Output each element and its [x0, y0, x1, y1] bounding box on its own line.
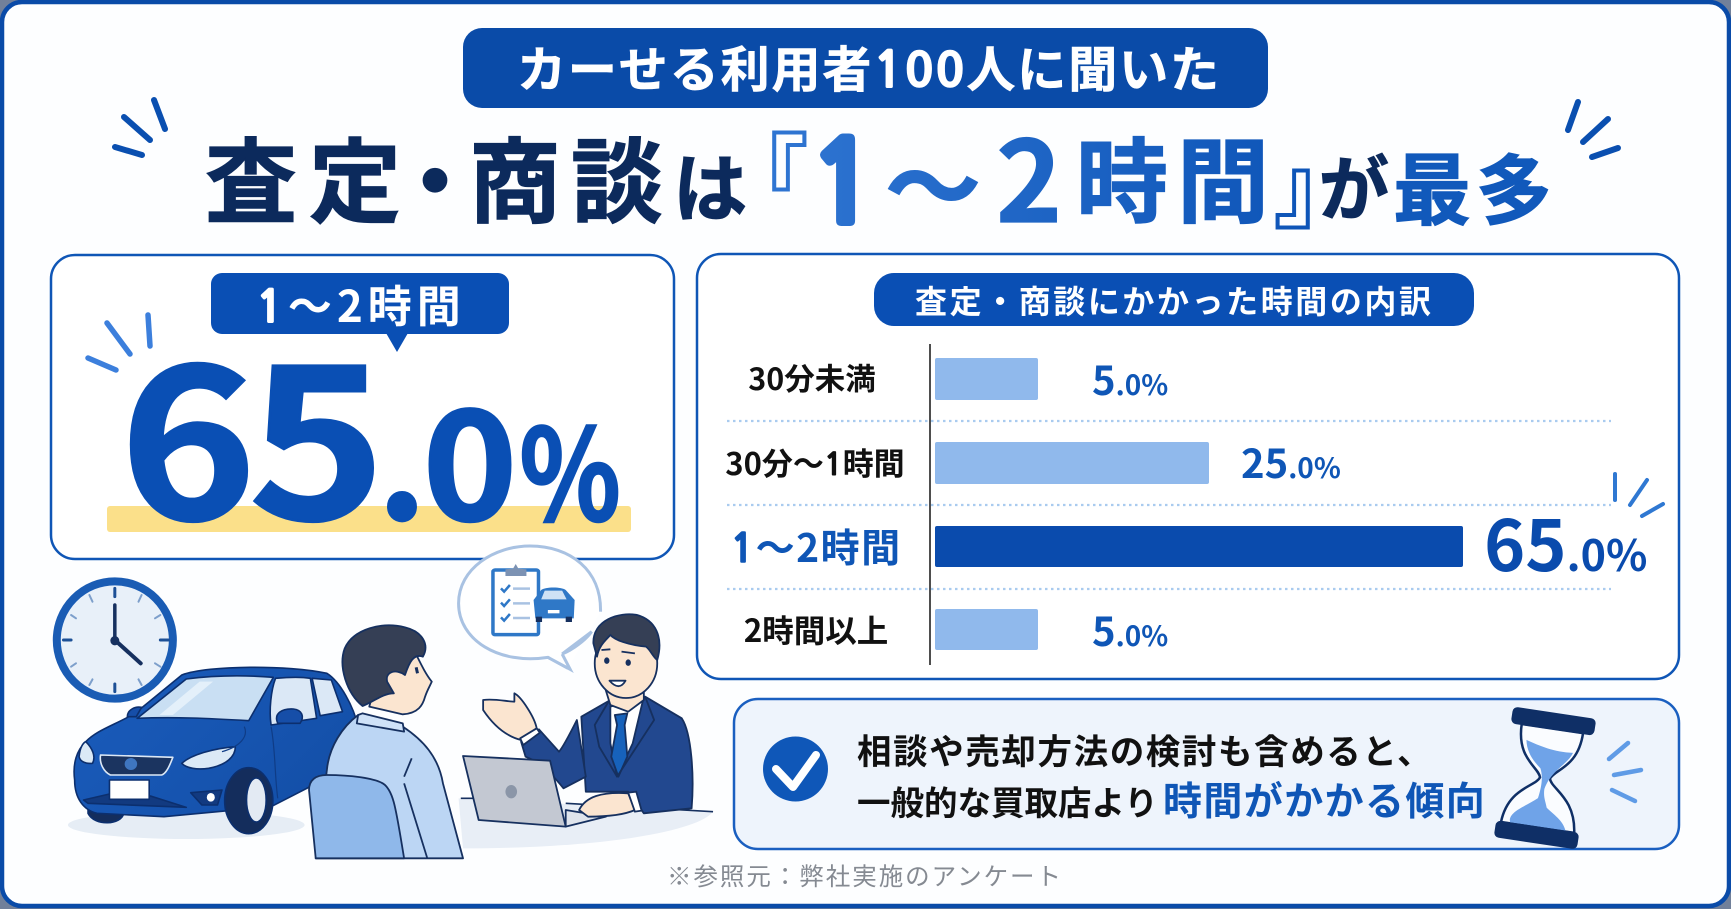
callout text: 一般的な買取店より — [857, 776, 1158, 825]
value 65.0%: 0 — [423, 349, 517, 563]
figure: customer — [309, 625, 463, 858]
row: over 2 hours: 5.0% — [1092, 600, 1168, 658]
main title: 談 — [571, 109, 663, 242]
row: under 30 min: 5.0% — [1092, 349, 1168, 407]
table — [459, 798, 713, 848]
main title: 査 — [205, 109, 297, 242]
icon: clipboard — [493, 564, 538, 635]
sparks by hourglass — [1609, 743, 1641, 801]
callout text: 相談や売却方法の検討も含めると、 — [857, 724, 1433, 774]
main title — [205, 93, 1552, 255]
value 65.0%: % — [519, 376, 621, 557]
main title: ～ — [885, 111, 981, 250]
row: 30 min to 1 hour — [725, 432, 1341, 490]
panel: breakdown chart — [697, 254, 1679, 679]
callout text: 時間がかかる傾向 — [1163, 771, 1486, 827]
row: 30 min to 1 hour: 30分～1時間 — [725, 439, 905, 484]
value 65.0%: 5 — [249, 280, 385, 579]
main title: 2 — [996, 93, 1062, 255]
main title: 』 — [1273, 115, 1365, 248]
value 65.0% — [120, 280, 621, 579]
main title: 定 — [309, 109, 401, 242]
axis — [929, 344, 931, 665]
main title: 時 — [1076, 109, 1168, 242]
icon: clock — [57, 581, 173, 699]
speech bubble — [459, 546, 601, 669]
row: 1 to 2 hours highlighted — [730, 491, 1647, 592]
main title: 1 — [809, 128, 877, 239]
laptop — [566, 810, 606, 827]
main title: が — [1319, 134, 1389, 235]
sparks — [88, 315, 150, 370]
main title: ・ — [389, 109, 481, 242]
icon: car — [68, 667, 358, 839]
tag: 1~2 hours: 1～2時間 — [256, 271, 466, 335]
title sparks right — [1568, 102, 1618, 157]
chair — [309, 775, 404, 858]
icon: check — [763, 736, 828, 802]
main title: 『 — [717, 103, 809, 236]
illustration: clock, car and sales consultation — [57, 546, 713, 858]
row: over 2 hours: 2時間以上 — [744, 606, 888, 652]
value 65.0%: 6 — [120, 280, 256, 579]
top pill heading: カーせる利用者100人に聞いた — [517, 31, 1219, 102]
tag: 1~2 hours — [211, 271, 509, 352]
main title: 間 — [1177, 109, 1269, 242]
main title: 商 — [469, 109, 561, 242]
value 65.0%: . — [378, 346, 426, 563]
main title: 最 — [1393, 129, 1471, 241]
dotted row separators — [727, 421, 1611, 589]
figure: salesperson — [463, 614, 693, 827]
icon: small car — [534, 587, 575, 622]
row: under 30 min — [748, 349, 1168, 407]
row: over 2 hours — [744, 600, 1168, 658]
row: under 30 min: 30分未満 — [748, 355, 876, 399]
panel: big number — [51, 255, 674, 579]
sparks by 65% — [1615, 474, 1663, 516]
icon: hourglass — [1494, 707, 1596, 849]
row: 1 to 2 hours highlighted: 1～2時間 — [730, 518, 902, 574]
source footnote: ※参照元：弊社実施のアンケート — [667, 858, 1061, 893]
callout panel — [734, 699, 1679, 849]
row: 30 min to 1 hour: 25.0% — [1241, 432, 1341, 490]
main title: は — [673, 130, 747, 237]
chart heading: 査定・商談にかかった時間の内訳 — [915, 277, 1431, 323]
main title: 多 — [1476, 130, 1552, 240]
row: 1 to 2 hours highlighted: 65.0% — [1484, 491, 1647, 592]
yellow highlight — [107, 506, 631, 532]
title sparks left — [115, 100, 165, 155]
